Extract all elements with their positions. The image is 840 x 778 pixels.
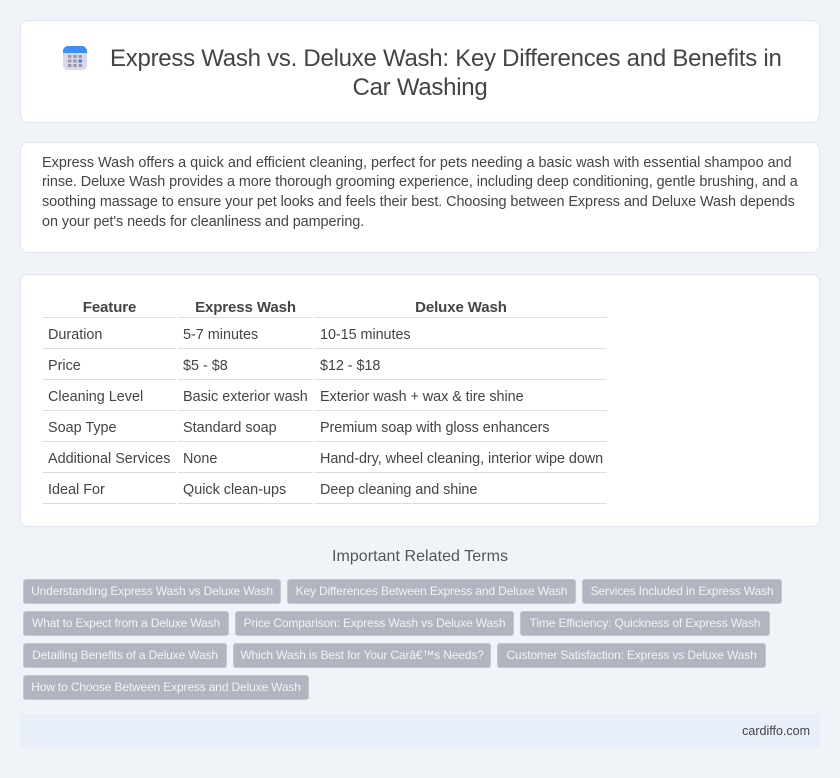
text block: description [42,154,798,230]
comparison table: None [183,451,217,467]
comparison table: Standard soap [183,420,277,436]
comparison table: Ideal For [48,482,105,498]
panel: related term tags: Price Comparison: Express Wash vs Deluxe Wash [244,616,505,630]
comparison table: Basic exterior wash [183,389,308,405]
panel: description [20,142,820,253]
title [110,45,782,101]
panel: related term tags: Detailing Benefits of a Deluxe Wash [32,648,218,662]
panel: comparison table [20,274,820,527]
comparison table: Exterior wash + wax & tire shine [320,389,524,405]
comparison table: Deep cleaning and shine [320,482,477,498]
text block: description: Express Wash offers a quick and efficient cleaning, perfect for pets needing a basic wash with essential shampoo and [42,154,792,170]
comparison table: Duration [48,327,102,343]
comparison table: Express Wash [195,299,296,316]
comparison table [43,299,607,504]
footer bar: cardiffo.com [742,724,810,738]
title: Car Washing [353,74,487,101]
text block: description: rinse. Deluxe Wash provides a more thorough grooming experience, including deep conditioning, gentle brushing, and a [42,174,798,190]
text block: description: soothing massage to ensure your pet looks and feels their best. Choosing between Express and Deluxe Wash depends [42,194,795,210]
panel: related term tags: What to Expect from a Deluxe Wash [32,616,220,630]
heading: related terms: Important Related Terms [332,548,508,565]
comparison table: Premium soap with gloss enhancers [320,420,550,436]
panel: related term tags: Services Included in Express Wash [591,584,773,598]
title: Express Wash vs. Deluxe Wash: Key Differences and Benefits in [110,45,782,72]
panel: related term tags: Key Differences Between Express and Deluxe Wash [296,584,567,598]
text block: description: on your pet's needs for cleanliness and pampering. [42,214,364,230]
panel: related term tags: Which Wash is Best for Your Carâ€™s Needs? [240,648,484,662]
comparison table: $12 - $18 [320,358,380,374]
panel: related term tags: Customer Satisfaction: Express vs Deluxe Wash [506,648,757,662]
footer bar [20,714,820,748]
comparison table: Soap Type [48,420,117,436]
comparison table: 5-7 minutes [183,327,258,343]
panel: related term tags: Understanding Express Wash vs Deluxe Wash [31,584,273,598]
panel: title header [20,20,820,123]
panel: related term tags [23,579,782,700]
comparison table: Feature [83,299,136,316]
comparison table: Deluxe Wash [415,299,507,316]
comparison table: Price [48,358,81,374]
comparison table: Additional Services [48,451,170,467]
comparison table: 10-15 minutes [320,327,411,343]
icon: calendar [63,46,87,70]
comparison table: Hand-dry, wheel cleaning, interior wipe down [320,451,603,467]
comparison table: Quick clean-ups [183,482,286,498]
panel: related term tags: How to Choose Between Express and Deluxe Wash [31,680,301,694]
panel: related term tags: Time Efficiency: Quickness of Express Wash [530,616,760,630]
comparison table: $5 - $8 [183,358,228,374]
comparison table: Cleaning Level [48,389,143,405]
